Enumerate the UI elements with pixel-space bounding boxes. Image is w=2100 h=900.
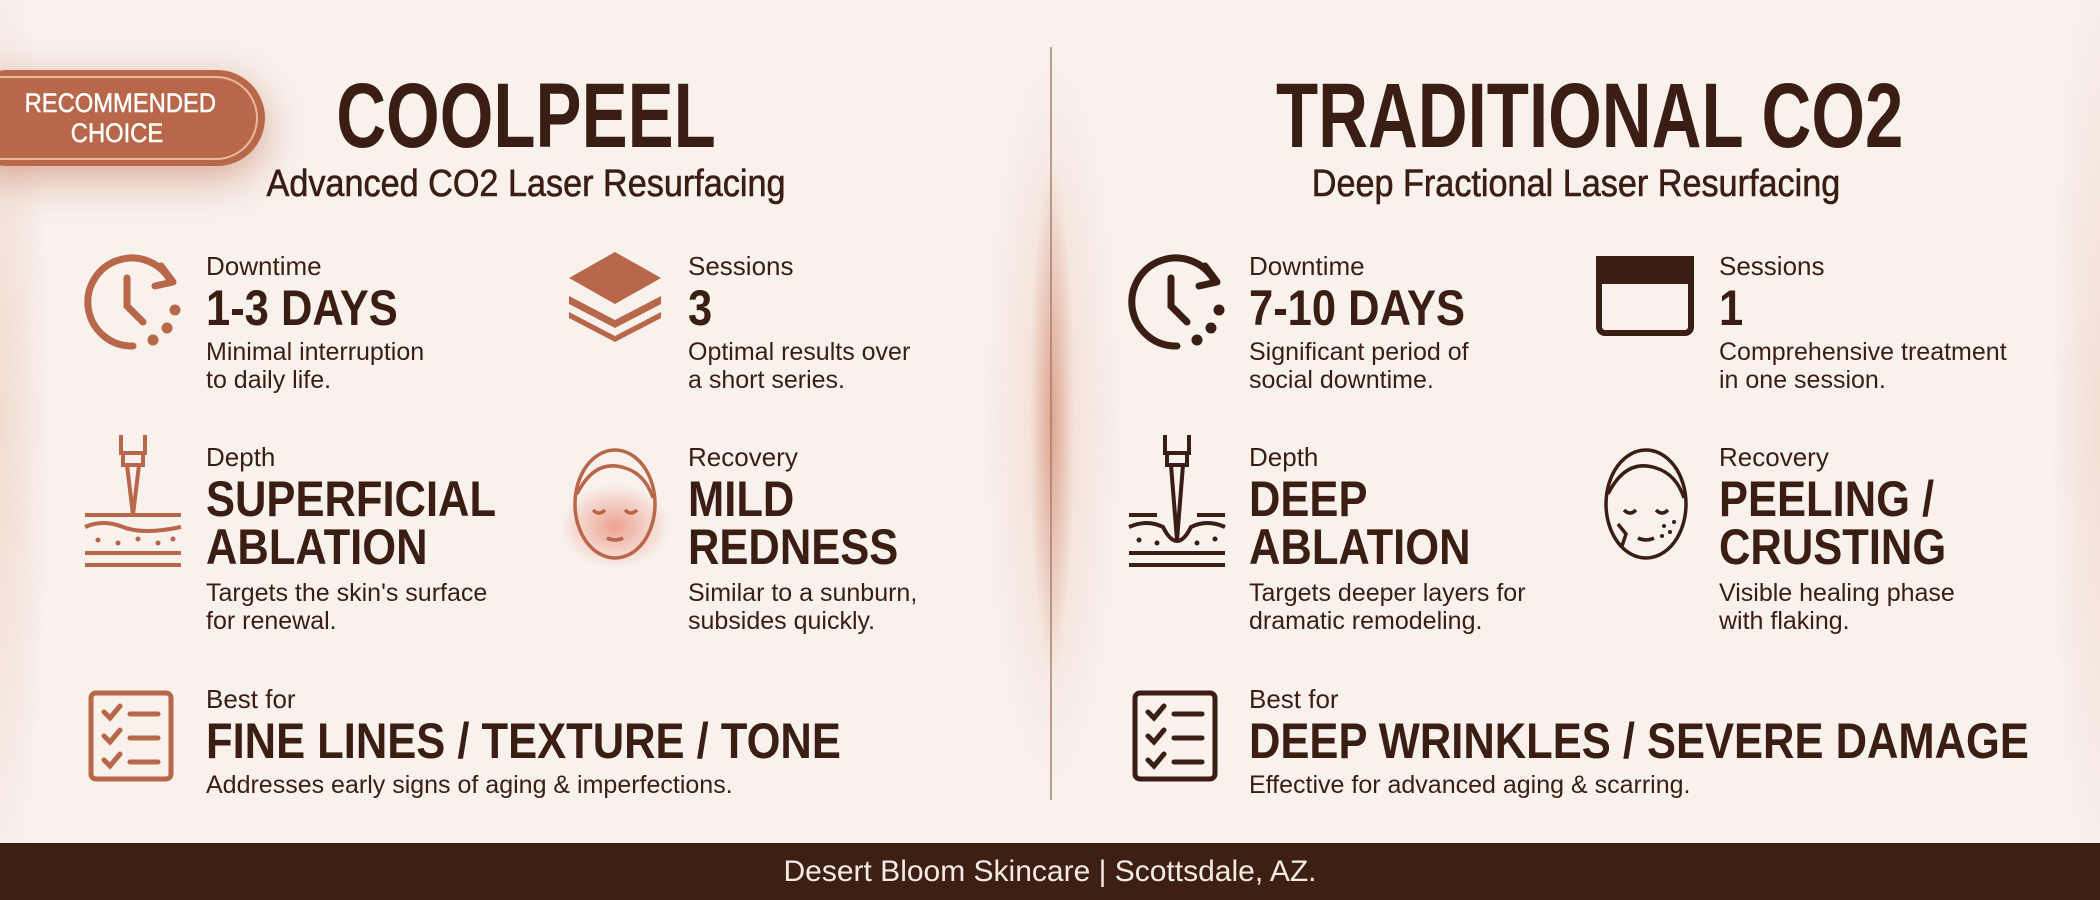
- text: depth: [206, 442, 496, 635]
- text: recovery: CRUSTING: [1719, 519, 1946, 575]
- text: downtime: Downtime: [206, 251, 322, 281]
- text: downtime: [1249, 251, 1469, 394]
- text: recovery: MILD: [688, 471, 794, 527]
- subtitle: coolpeel: Advanced CO2 Laser Resurfacing: [267, 163, 785, 205]
- text: depth: Targets the skin's surface: [206, 579, 487, 607]
- text: depth: for renewal.: [206, 607, 337, 635]
- text: recovery: [688, 442, 917, 635]
- badge: recommended choice: RECOMMENDED: [25, 88, 216, 118]
- text: best for: DEEP WRINKLES / SEVERE DAMAGE: [1249, 713, 2029, 769]
- text: recovery: Visible healing phase: [1719, 579, 1955, 607]
- text: recovery: with flaking.: [1719, 607, 1850, 635]
- text: recovery: Recovery: [688, 442, 798, 472]
- text: best for: Best for: [206, 684, 296, 714]
- text: sessions: in one session.: [1719, 366, 1886, 394]
- badge: recommended choice: [0, 70, 265, 166]
- text: downtime: Minimal interruption: [206, 338, 424, 366]
- icon: calendar: [1596, 256, 1694, 336]
- text: depth: [1249, 442, 1526, 635]
- text: best for: FINE LINES / TEXTURE / TONE: [206, 713, 841, 769]
- footer: [0, 843, 2100, 900]
- text: best for: Effective for advanced aging & scarring.: [1249, 771, 1690, 799]
- icon: clock: [1128, 254, 1224, 350]
- icon: clock: [84, 254, 180, 350]
- icon: layers: [569, 252, 661, 342]
- text: best for: Best for: [1249, 684, 1339, 714]
- title: coolpeel: COOLPEEL: [336, 65, 716, 167]
- subtitle: traditional: Deep Fractional Laser Resurfacing: [1312, 163, 1840, 205]
- icon: face peeling: [1604, 448, 1688, 560]
- text: depth: dramatic remodeling.: [1249, 607, 1482, 635]
- text: sessions: Sessions: [1719, 251, 1824, 281]
- text: sessions: Comprehensive treatment: [1719, 338, 2007, 366]
- panel: traditional co2: [1128, 251, 2029, 799]
- divider line: [1050, 47, 1052, 800]
- text: sessions: [688, 251, 910, 394]
- icon: checklist: [88, 690, 174, 782]
- icon: checklist: [1132, 690, 1218, 782]
- text: sessions: 3: [688, 280, 712, 336]
- text: recovery: REDNESS: [688, 519, 898, 575]
- text: depth: Targets deeper layers for: [1249, 579, 1526, 607]
- text: recovery: subsides quickly.: [688, 607, 875, 635]
- badge: recommended choice: CHOICE: [71, 118, 163, 148]
- text: downtime: Downtime: [1249, 251, 1365, 281]
- icon: laser deep: [1128, 435, 1226, 567]
- text: depth: DEEP: [1249, 471, 1367, 527]
- text: recovery: [1719, 442, 1955, 635]
- text: sessions: a short series.: [688, 366, 845, 394]
- text: downtime: to daily life.: [206, 366, 331, 394]
- text: downtime: [206, 251, 424, 394]
- text: recovery: Similar to a sunburn,: [688, 579, 917, 607]
- icon: laser superficial: [84, 435, 182, 567]
- text: sessions: Optimal results over: [688, 338, 910, 366]
- text: downtime: 1-3 DAYS: [206, 280, 398, 336]
- text: sessions: Sessions: [688, 251, 794, 281]
- title: traditional co2: TRADITIONAL CO2: [1276, 65, 1903, 167]
- text: sessions: [1719, 251, 2007, 394]
- text: downtime: 7-10 DAYS: [1249, 280, 1465, 336]
- text: best for: [1249, 684, 2029, 799]
- text: depth: SUPERFICIAL: [206, 471, 496, 527]
- text: depth: Depth: [206, 442, 275, 472]
- text: sessions: 1: [1719, 280, 1743, 336]
- text: depth: ABLATION: [1249, 519, 1470, 575]
- text: downtime: Significant period of: [1249, 338, 1469, 366]
- panel: coolpeel: [84, 251, 917, 799]
- text: depth: ABLATION: [206, 519, 427, 575]
- icon: face redness: [565, 448, 665, 564]
- text: depth: Depth: [1249, 442, 1318, 472]
- text: best for: Addresses early signs of aging & imperfections.: [206, 771, 733, 799]
- text: downtime: social downtime.: [1249, 366, 1434, 394]
- footer: Desert Bloom Skincare | Scottsdale, AZ.: [783, 855, 1316, 888]
- text: best for: [206, 684, 841, 799]
- text: recovery: PEELING /: [1719, 471, 1934, 527]
- text: recovery: Recovery: [1719, 442, 1829, 472]
